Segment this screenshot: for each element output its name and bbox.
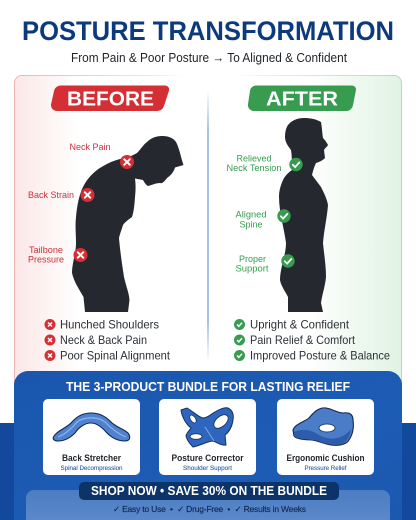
label: aligned spine: Aligned — [236, 210, 266, 220]
posture corrector note: Shoulder Support — [183, 465, 232, 472]
label: relieved neck tension: Relieved — [236, 154, 272, 164]
list: before problems: Poor Spinal Alignment — [60, 348, 171, 362]
marker: back — [80, 188, 94, 202]
back stretcher note: Spinal Decompression — [60, 465, 123, 472]
label: tailbone pressure — [28, 245, 64, 264]
cushion note: Pressure Relief — [304, 465, 347, 472]
label: back strain: Back Strain — [28, 190, 74, 200]
label: relieved neck tension — [226, 154, 282, 173]
card: ergonomic cushion — [277, 399, 374, 475]
before badge: BEFORE — [67, 88, 154, 110]
label: aligned spine: Spine — [240, 220, 262, 230]
after badge: AFTER — [266, 88, 338, 110]
inner lighter footer panel — [26, 490, 390, 520]
subtitle: From Pain & Poor Posture → To Aligned & Confident — [71, 51, 347, 65]
label: proper support: Support — [236, 264, 269, 274]
card: posture corrector — [159, 399, 256, 475]
icon: posture corrector — [181, 408, 233, 447]
label: tailbone pressure: Tailbone — [29, 245, 63, 255]
bundle heading: THE 3-PRODUCT BUNDLE FOR LASTING RELIEF — [66, 379, 350, 394]
card: back stretcher — [43, 399, 140, 475]
label: proper support: Proper — [239, 254, 266, 264]
list: after benefits: Upright & Confident — [250, 318, 350, 332]
marker: neck check — [289, 158, 303, 171]
label: neck pain: Neck Pain — [70, 142, 110, 152]
cushion name: Ergonomic Cushion — [286, 453, 365, 463]
label: aligned spine — [236, 210, 266, 230]
panel: before — [14, 75, 208, 385]
after badge — [248, 85, 356, 111]
marker: neck — [120, 155, 134, 169]
marker: support check — [281, 254, 295, 268]
icon: cushion — [293, 408, 353, 445]
label: tailbone pressure: Pressure — [28, 254, 64, 264]
list: after benefits — [234, 318, 390, 362]
list: before problems: Neck & Back Pain — [60, 333, 147, 347]
back stretcher name: Back Stretcher — [62, 453, 121, 463]
before badge — [51, 85, 169, 111]
panel: bundle — [14, 371, 402, 520]
assurances: ✓ Easy to Use • ✓ Drug-Free • ✓ Results in Weeks — [113, 504, 306, 514]
silhouette: hunched figure — [72, 136, 184, 312]
title: POSTURE TRANSFORMATION — [22, 16, 394, 46]
panel: after — [208, 75, 402, 385]
marker: spine check — [277, 209, 291, 223]
marker: tailbone — [74, 248, 88, 262]
list: after benefits: Improved Posture & Balance — [250, 348, 390, 362]
icon: back stretcher — [53, 413, 130, 441]
label: proper support — [236, 254, 269, 274]
call to action: SHOP NOW • SAVE 30% ON THE BUNDLE — [91, 483, 327, 498]
label: relieved neck tension: Neck Tension — [226, 163, 282, 173]
list: before problems — [44, 318, 171, 362]
list: after benefits: Pain Relief & Comfort — [250, 333, 356, 347]
list: before problems: Hunched Shoulders — [60, 318, 159, 332]
silhouette: upright figure — [279, 118, 328, 312]
posture corrector name: Posture Corrector — [172, 453, 244, 463]
